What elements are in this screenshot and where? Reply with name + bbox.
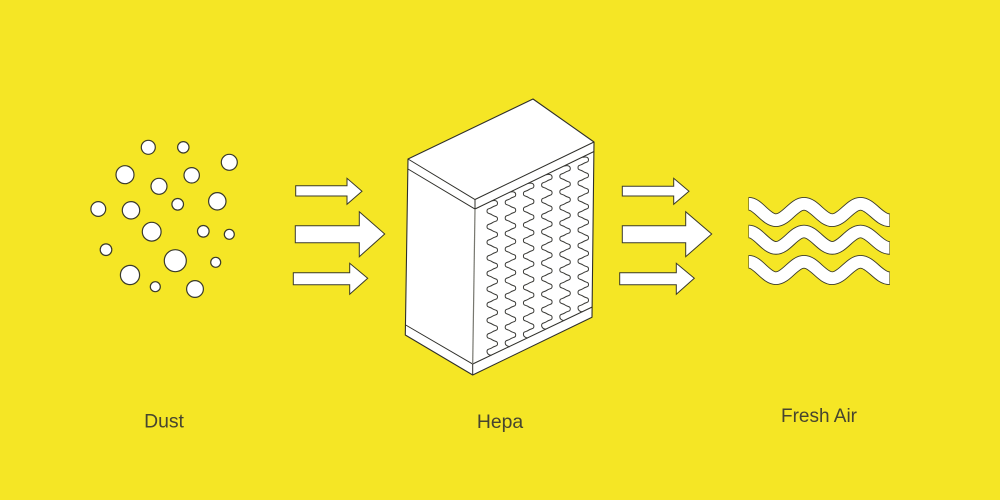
label: Dust: Dust xyxy=(144,410,185,432)
fresh air waves xyxy=(748,204,890,278)
filter pleats xyxy=(487,157,588,355)
arrows: dust into filter xyxy=(293,178,385,294)
label: Fresh Air: Fresh Air xyxy=(781,406,858,427)
hepa filter block xyxy=(405,99,594,375)
arrows: filter to fresh air xyxy=(620,178,712,294)
dust particles xyxy=(91,140,237,297)
label: Hepa: Hepa xyxy=(477,411,523,433)
